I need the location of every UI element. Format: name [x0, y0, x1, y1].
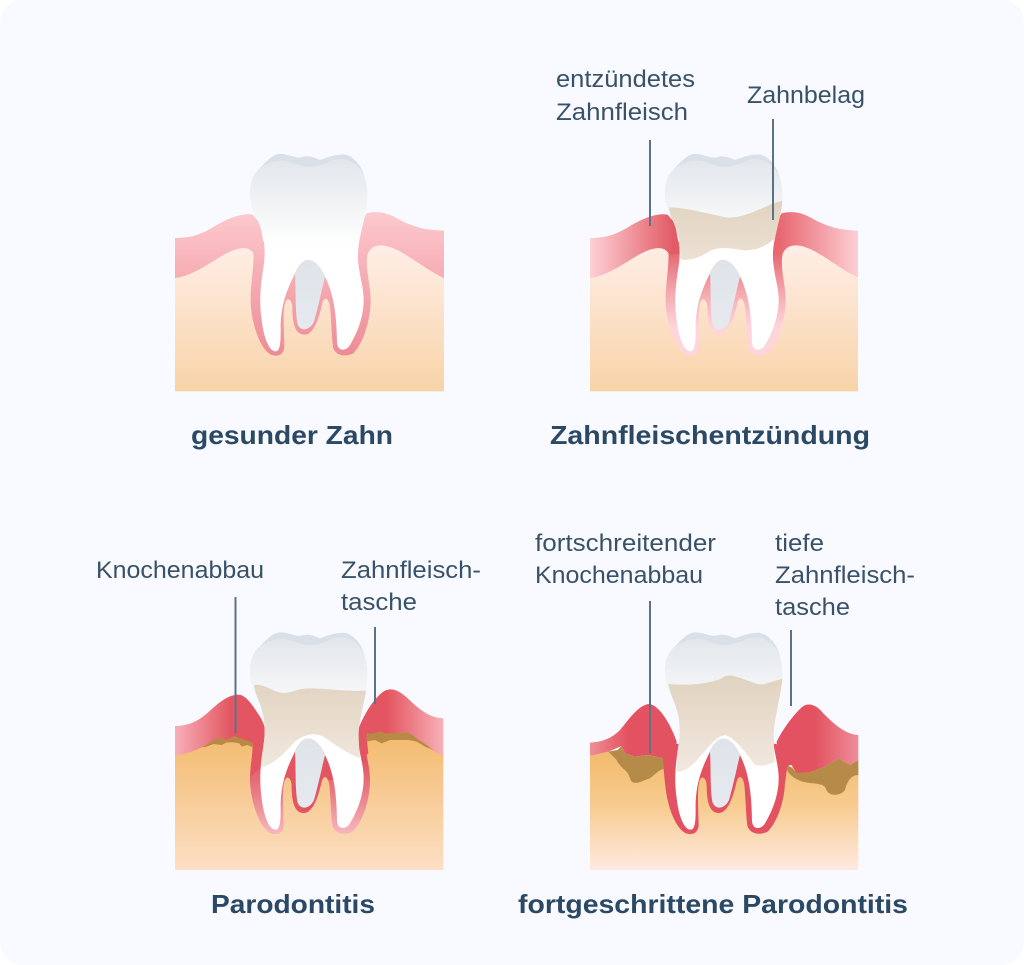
callout line: tiefe Zahnfleischtasche: [790, 630, 792, 706]
panel: Parodontitis: [175, 632, 443, 870]
bone loss: [202, 732, 433, 750]
heading: Zahnfleischentzündung: Zahnfleischentzündung: [550, 420, 870, 450]
callout line: Zahnfleischtasche: [374, 627, 376, 704]
bone: [590, 752, 858, 870]
panel: fortgeschrittene Parodontitis: [590, 632, 858, 870]
label: Zahnfleischtasche: Zahnfleisch-: [341, 557, 481, 584]
label: tiefe Zahnfleischtasche: tasche: [775, 594, 850, 621]
label: tiefe Zahnfleischtasche: [775, 530, 915, 621]
heading: gesunder Zahn: gesunder Zahn: [191, 420, 393, 450]
panel: Zahnfleischentzündung: [590, 154, 858, 391]
label: entzündetes Zahnfleisch: [556, 66, 695, 126]
label: entzündetes Zahnfleisch: Zahnfleisch: [556, 99, 688, 126]
label: entzündetes Zahnfleisch: entzündetes: [556, 66, 695, 93]
callout line: Knochenabbau: [234, 597, 236, 733]
tooth with plaque: [250, 632, 367, 830]
label: fortschreitender Knochenabbau: [535, 530, 716, 589]
tooth with plaque: [665, 154, 782, 351]
label: fortschreitender Knochenabbau: fortschreitender: [535, 530, 716, 557]
label: Zahnfleischtasche: [341, 557, 481, 616]
heading: fortgeschrittene Parodontitis: fortgeschrittene Parodontitis: [518, 889, 908, 919]
label: Knochenabbau: Knochenabbau: [96, 557, 264, 584]
bone: [175, 240, 444, 391]
label: Zahnbelag: Zahnbelag: [747, 82, 865, 109]
plaque: [254, 685, 366, 767]
bone: [590, 240, 858, 391]
bone loss: [608, 746, 858, 795]
label: tiefe Zahnfleischtasche: Zahnfleisch-: [775, 562, 915, 589]
heading: Parodontitis: Parodontitis: [211, 889, 375, 919]
inflamed gum: [175, 689, 443, 834]
tooth: [250, 154, 367, 351]
panel: gesunder Zahn: [175, 154, 444, 391]
plaque: [669, 201, 782, 260]
label: Zahnfleischtasche: tasche: [341, 589, 417, 616]
inflamed gum: [590, 212, 858, 356]
label: tiefe Zahnfleischtasche: tiefe: [775, 530, 824, 557]
bone: [175, 732, 443, 870]
callout line: entzündetes Zahnfleisch: [649, 140, 651, 226]
callout line: Zahnbelag: [772, 119, 774, 220]
plaque: [668, 675, 782, 772]
inflamed gum: [590, 704, 858, 834]
tooth with plaque: [665, 632, 782, 830]
label: fortschreitender Knochenabbau: Knochenabbau: [535, 562, 703, 589]
callout line: fortschreitender Knochenabbau: [649, 601, 651, 753]
gum: [175, 212, 444, 356]
